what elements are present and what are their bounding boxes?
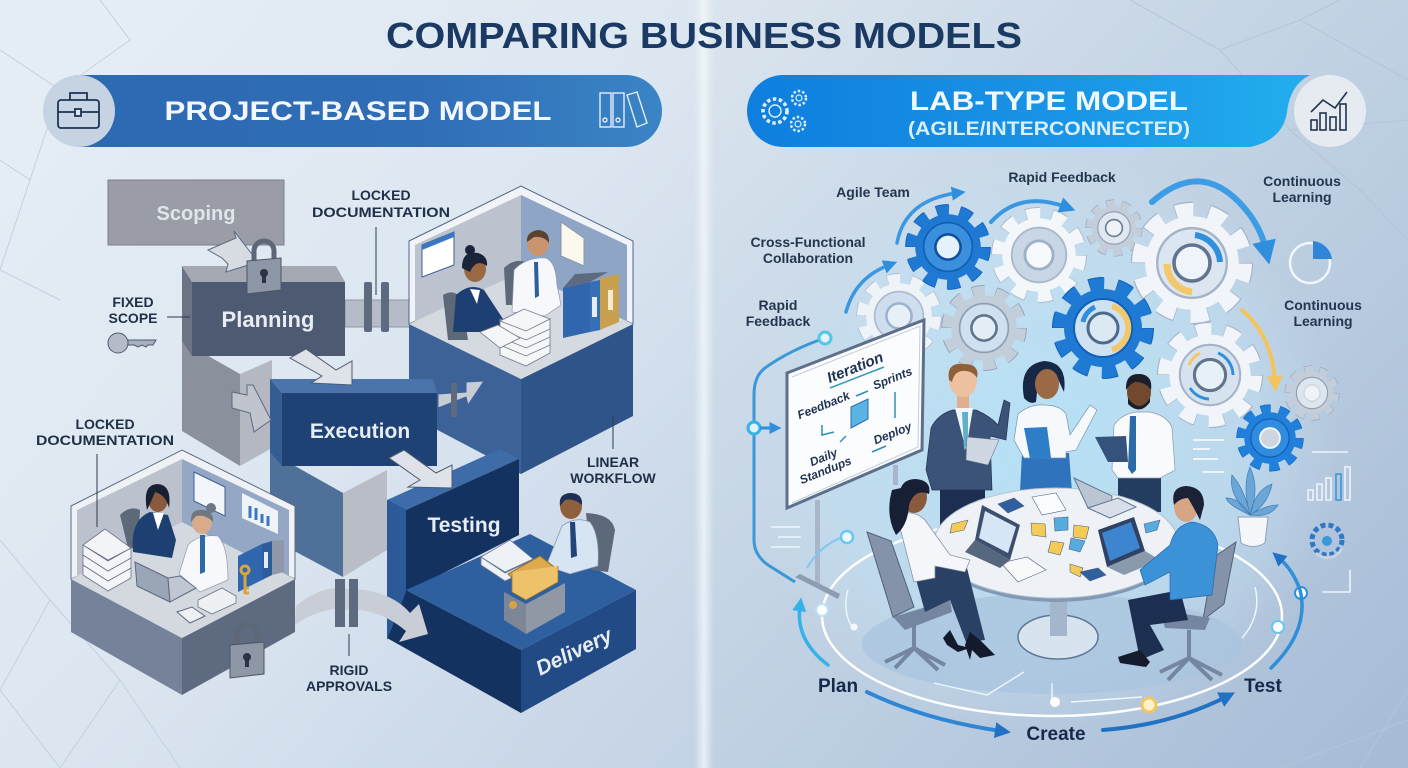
label: linear workflow: LINEAR — [587, 454, 639, 470]
person: woman in white shirt — [179, 503, 228, 592]
label: cross-functional collaboration: Cross-Functional — [750, 234, 866, 250]
label: plan: Plan — [818, 676, 858, 697]
whiteboard — [787, 320, 924, 599]
room: top right office — [409, 186, 633, 474]
label: locked documentation top: LOCKED — [351, 187, 411, 203]
banner heading: (AGILE/INTERCONNECTED) — [908, 119, 1190, 140]
arrow: execution to room — [438, 381, 484, 417]
arc details on big gear — [1195, 235, 1220, 262]
label: locked documentation top: DOCUMENTATION — [312, 204, 450, 220]
step: testing and delivery block — [387, 449, 636, 713]
icon: growth chart — [1311, 92, 1347, 130]
icon: gears — [763, 91, 806, 131]
stack of papers — [480, 309, 550, 366]
laptop — [135, 562, 196, 602]
tablet — [177, 607, 205, 623]
arrow: scoping to planning — [208, 231, 258, 272]
step: scoping — [108, 180, 284, 245]
arrow: plan upward — [799, 606, 828, 665]
arrow: execution to testing — [389, 450, 452, 488]
wall window — [194, 472, 225, 516]
person: seated man — [1118, 486, 1236, 680]
gear: small grey — [1090, 204, 1138, 252]
icon: padlock bottom — [230, 625, 264, 678]
table — [934, 478, 1178, 659]
step: execution block: Execution — [310, 420, 410, 443]
arrow: cross-functional — [846, 265, 889, 312]
gear: small blue right — [1242, 410, 1298, 466]
person: delivery worker — [546, 493, 615, 574]
whiteboard: Feedback — [795, 388, 853, 422]
board text: Iteration — [825, 349, 886, 387]
step: planning block — [182, 266, 345, 466]
blue connector line — [748, 332, 853, 582]
label: locked documentation bottom: DOCUMENTATION — [36, 432, 174, 448]
gear: small grey right — [1289, 370, 1335, 416]
plant — [1226, 467, 1278, 546]
banner heading: PROJECT-BASED MODEL — [164, 96, 552, 126]
wall window — [422, 232, 454, 277]
arrow: rapid feedback — [991, 201, 1066, 222]
small paper stack — [198, 588, 236, 614]
gear: blue with yellow arc — [1060, 285, 1146, 371]
gear: grey white — [948, 292, 1020, 364]
labels: gears — [746, 169, 1362, 329]
cycle arrows — [799, 558, 1302, 731]
label: locked documentation bottom: LOCKED — [75, 416, 135, 432]
gear: white right — [1165, 330, 1255, 420]
label: locked documentation top — [312, 187, 450, 295]
arrow: planning side to execution — [232, 385, 271, 432]
label: rigid approvals: RIGID — [330, 662, 368, 678]
left: connector planning to room — [345, 282, 411, 332]
gear: light left — [863, 280, 935, 352]
gears cluster — [863, 204, 1335, 466]
step: planning block: Planning — [222, 307, 314, 332]
label: fixed scope: SCOPE — [108, 310, 158, 326]
step: testing and delivery block: Delivery — [532, 623, 617, 680]
gear: big white — [1140, 211, 1244, 315]
banner: lab-type model — [747, 75, 1366, 147]
arrow: test upward — [1271, 558, 1302, 668]
stack of papers: delivery — [481, 540, 533, 581]
person: standing man with tablet — [1095, 374, 1175, 512]
label: rapid feedback left: Rapid — [759, 297, 797, 313]
label: continuous learning right: Learning — [1293, 313, 1353, 329]
locked folder box — [504, 556, 565, 634]
side gear icon — [1312, 525, 1342, 558]
gear: white top — [999, 215, 1079, 295]
label: agile team: Agile Team — [836, 184, 910, 200]
title: COMPARING BUSINESS MODELS — [386, 15, 1022, 56]
banner heading: LAB-TYPE MODEL — [910, 86, 1188, 116]
arrow: continuous learning — [1152, 181, 1266, 250]
label: continuous learning top: Learning — [1272, 189, 1332, 205]
label: locked documentation bottom — [36, 416, 174, 527]
label: linear workflow — [570, 416, 657, 486]
step: testing and delivery block: Testing — [427, 514, 501, 537]
stack of papers — [83, 529, 131, 591]
person: standing woman — [1014, 361, 1097, 492]
arrow: create to test — [1103, 697, 1226, 730]
banner heading — [908, 86, 1190, 140]
label: fixed scope: FIXED — [112, 294, 154, 310]
icon: padlock top — [247, 241, 281, 294]
step: scoping: Scoping — [157, 203, 235, 225]
wall document — [561, 222, 584, 266]
whiteboard: Standups — [798, 453, 854, 487]
right: cycle ring and floor — [771, 516, 1307, 716]
laptop: back — [1074, 478, 1136, 518]
person: seated woman — [867, 479, 995, 670]
arrow: planning to execution — [290, 349, 352, 385]
binders — [238, 540, 284, 592]
flow arrows on gears — [846, 181, 1275, 382]
person: woman in navy suit — [120, 484, 176, 558]
person: woman in navy suit — [443, 245, 505, 340]
labels: cycle — [818, 676, 1282, 745]
label: test: Test — [1244, 676, 1282, 697]
pie icon — [1290, 241, 1332, 283]
arrow: yellow — [1242, 310, 1275, 382]
icon: binders — [600, 92, 647, 127]
arrow: plan to create — [867, 692, 1001, 731]
label: fixed scope — [108, 294, 190, 326]
laptop: left — [965, 505, 1020, 568]
label: continuous learning right: Continuous — [1284, 297, 1362, 313]
icon: yellow key — [241, 566, 249, 594]
person: standing man in suit — [926, 363, 1010, 530]
step: execution block — [270, 379, 437, 577]
label: cross-functional collaboration: Collaboration — [763, 250, 853, 266]
icon: grey key — [108, 333, 156, 353]
label: rigid approvals — [306, 634, 392, 694]
label: continuous learning top: Continuous — [1263, 173, 1341, 189]
wall chart — [242, 493, 278, 534]
label: rigid approvals: APPROVALS — [306, 678, 392, 694]
banner: project-based model — [43, 75, 662, 147]
whiteboard: Sprints — [871, 364, 915, 393]
label: rapid feedback left: Feedback — [746, 313, 811, 329]
label: linear workflow: WORKFLOW — [570, 470, 657, 486]
room: bottom left office — [71, 450, 295, 695]
arrow: to agile team — [897, 193, 957, 243]
side mini chart — [1193, 440, 1350, 592]
laptop: right — [1098, 517, 1160, 575]
arrow: room to delivery with gates — [295, 579, 428, 642]
binders — [563, 272, 619, 338]
sticky notes and devices — [950, 493, 1160, 582]
whiteboard: Daily — [808, 445, 841, 469]
label: rapid feedback top: Rapid Feedback — [1008, 169, 1116, 185]
gear: blue agile — [912, 211, 984, 283]
person: man in white shirt — [504, 230, 561, 316]
whiteboard: Deploy — [871, 419, 915, 447]
label: create: Create — [1026, 724, 1086, 745]
icon: briefcase — [58, 93, 99, 128]
